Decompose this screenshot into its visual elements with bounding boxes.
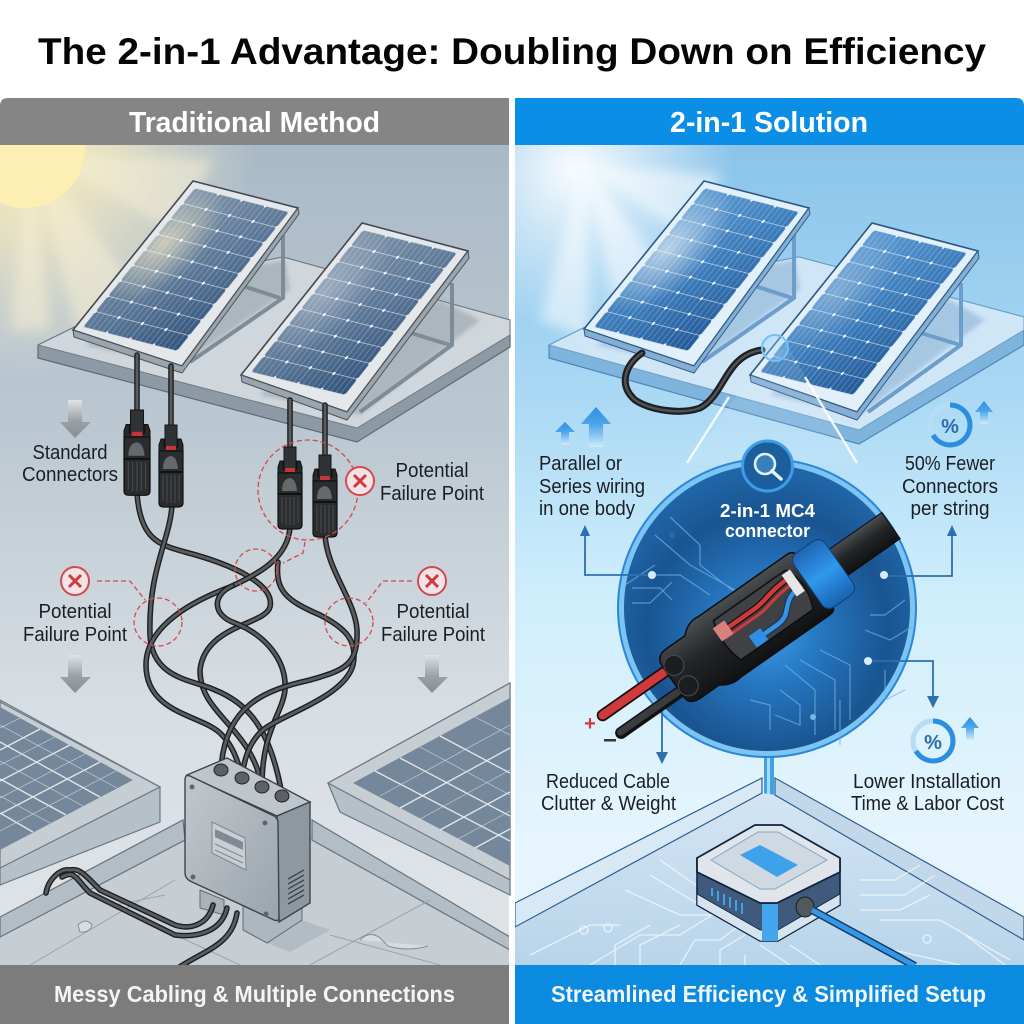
callout: reduced clutter: Clutter & Weight — [541, 793, 676, 815]
solar panel 2 — [241, 223, 469, 420]
right solar panel 1 — [584, 181, 810, 373]
failure icon right — [418, 567, 446, 595]
percent icon upper: % — [941, 416, 959, 438]
combiner device — [697, 825, 840, 941]
callout: lower cost — [851, 771, 1004, 815]
zoom disc — [618, 459, 916, 757]
failure label upper: Failure Point — [380, 483, 484, 505]
sun and rays — [0, 145, 233, 354]
failure label left: Potential — [38, 601, 112, 623]
right roof platform — [549, 257, 1024, 444]
failure label upper: Potential — [396, 460, 468, 482]
left header bar: Traditional Method — [129, 107, 380, 139]
callout: fewer connectors: Connectors — [902, 476, 998, 498]
page title: The 2-in-1 Advantage: Doubling Down on Efficiency — [38, 31, 986, 72]
failure label left — [23, 601, 127, 646]
left roof platform — [38, 257, 510, 442]
junction box — [185, 758, 330, 952]
failure icon upper — [346, 467, 374, 495]
callout: fewer connectors: 50% Fewer — [905, 453, 995, 475]
blue collar — [789, 536, 858, 612]
right header bar — [515, 98, 1024, 145]
magnifier badge — [742, 441, 792, 491]
2-in-1 connector label: connector — [725, 521, 810, 541]
disc callout lines — [580, 525, 957, 764]
black output cable — [825, 512, 900, 579]
callout: reduced clutter: Reduced Cable — [546, 771, 670, 793]
polarity symbols: + — [584, 713, 596, 735]
failure point markers — [97, 440, 412, 646]
black negative wire — [621, 678, 699, 733]
callout: fewer connectors — [902, 453, 998, 520]
connector body — [651, 550, 836, 711]
right footer bar — [515, 965, 1024, 1024]
single neat cable — [625, 350, 762, 411]
callout: lower cost: Lower Installation — [853, 771, 1001, 793]
2-in-1 connector label: 2-in-1 MC4 — [720, 501, 815, 521]
percent icon lower — [913, 717, 979, 761]
tangled cables — [137, 355, 357, 795]
lower roof floor — [0, 820, 510, 965]
left footer bar — [0, 965, 509, 1024]
blue up arrows — [555, 407, 611, 447]
callout: parallel or series — [539, 453, 645, 520]
standard connectors label: Standard — [32, 442, 108, 464]
left panel background — [0, 145, 509, 965]
callout: lower cost: Time & Labor Cost — [851, 793, 1004, 815]
zoom beam from connection point — [687, 335, 857, 465]
percent icon lower: % — [924, 732, 942, 754]
lower-left solar panel — [0, 700, 160, 885]
polarity symbols — [584, 713, 616, 742]
standard connectors label — [22, 442, 118, 486]
standard connectors label: Connectors — [22, 464, 118, 486]
percent icon upper — [930, 401, 993, 445]
cutaway window — [710, 567, 818, 662]
sunlight glow — [515, 145, 726, 336]
failure label upper — [380, 460, 484, 505]
2-in-1 connector label — [720, 501, 815, 541]
failure label right — [381, 601, 485, 646]
callout: parallel or series: in one body — [539, 498, 635, 520]
right solar panel 2 — [750, 223, 979, 420]
grey down arrows — [60, 400, 448, 693]
callout: parallel or series: Series wiring — [539, 476, 645, 498]
right mount frames — [702, 235, 961, 412]
lower-right solar panel — [328, 683, 510, 895]
right roof floor — [515, 778, 1024, 965]
failure icon left — [61, 567, 89, 595]
red positive wire — [603, 658, 685, 715]
failure label right: Failure Point — [381, 624, 485, 646]
callout: fewer connectors: per string — [910, 498, 990, 520]
stem to device — [764, 752, 774, 828]
device output cable — [812, 910, 915, 966]
solar panel mount frames — [190, 235, 452, 412]
left header bar — [0, 98, 509, 145]
failure label left: Failure Point — [23, 624, 127, 646]
panel: traditional method — [0, 0, 510, 1024]
standard connectors — [124, 410, 337, 537]
right header bar: 2-in-1 Solution — [670, 107, 868, 139]
left footer bar: Messy Cabling & Multiple Connections — [54, 981, 455, 1007]
failure label right: Potential — [396, 601, 470, 623]
callout: parallel or series: Parallel or — [539, 453, 622, 475]
right footer bar: Streamlined Efficiency & Simplified Setup — [551, 981, 986, 1007]
2-in-1 MC4 connector — [588, 496, 913, 755]
solar panel 1 — [73, 181, 299, 373]
exit cables — [46, 870, 237, 968]
callout: reduced clutter — [541, 771, 676, 815]
right panel background — [515, 145, 1024, 965]
panel: 2-in-1 solution — [515, 98, 1024, 1024]
